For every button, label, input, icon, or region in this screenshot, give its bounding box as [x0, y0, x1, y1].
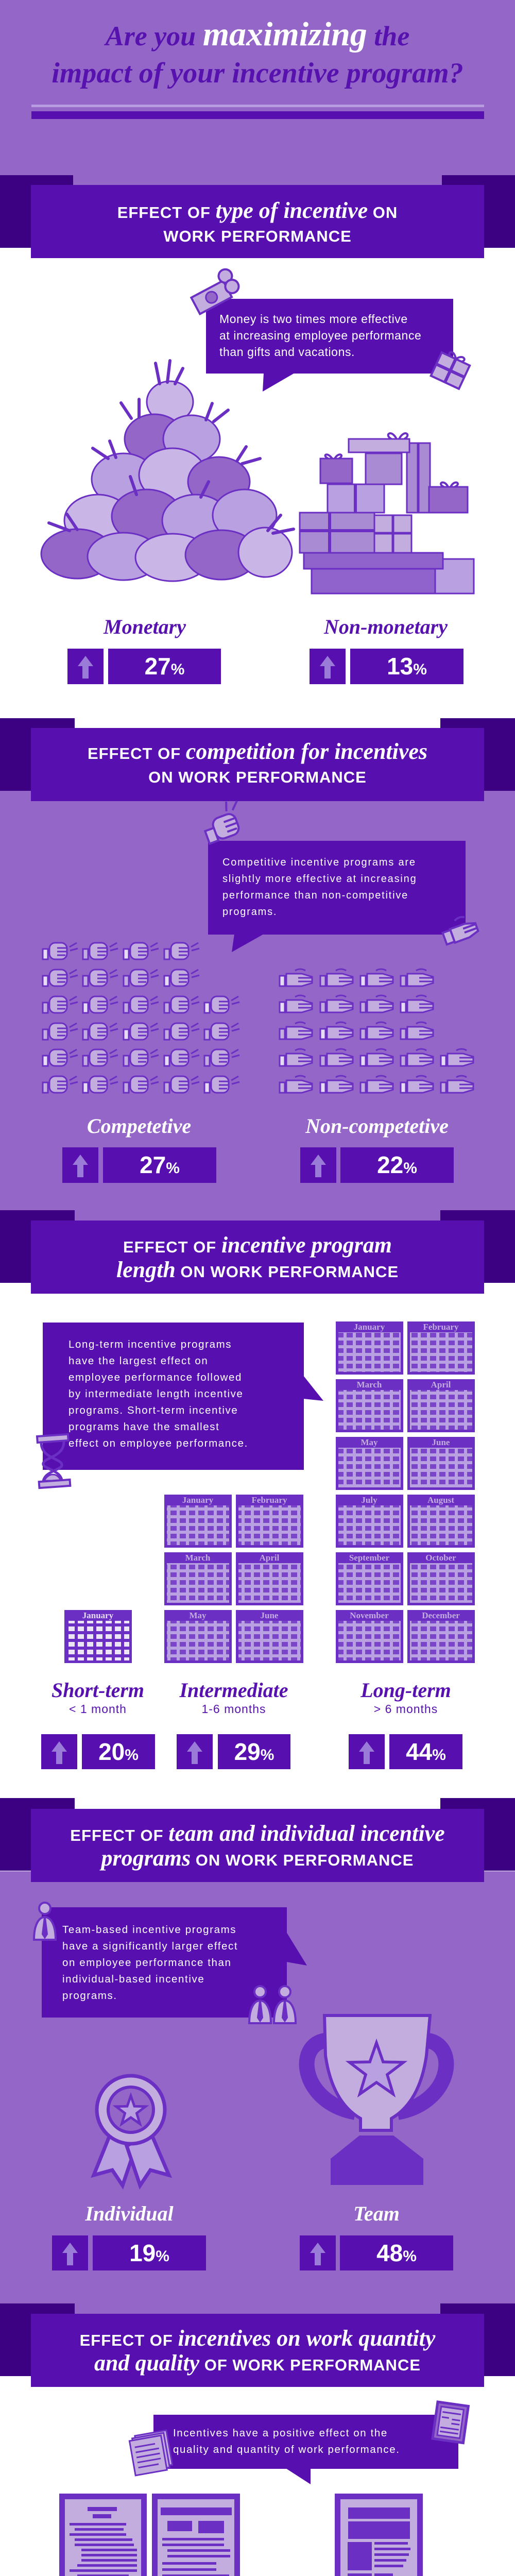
calendars: long-term: March: [357, 1380, 382, 1389]
stat: monetary 27%: 27%: [145, 653, 184, 680]
stat: non-monetary 13%: [310, 649, 464, 684]
background: team section: [0, 1871, 515, 2307]
callout box 5: [153, 2415, 458, 2484]
calendars: intermediate: April: [260, 1553, 280, 1563]
text: Intermediate: [179, 1679, 288, 1702]
stat: non-competitive 22%: [300, 1147, 454, 1183]
calendars: intermediate: January: [182, 1495, 214, 1505]
icon: hourglass: [37, 1434, 70, 1488]
icon: newspaper stack: [129, 2430, 173, 2476]
calendar: short-term January: January: [82, 1611, 114, 1620]
text: callout 2: performance than non-competitive: [222, 890, 408, 901]
icon: two persons: [249, 1986, 296, 2023]
label: Long-term: [360, 1679, 451, 1716]
calendars: long-term: [336, 1321, 475, 1663]
text: callout 1: [219, 312, 421, 359]
calendars: intermediate: [164, 1495, 303, 1663]
label: Individual: Individual: [85, 2202, 174, 2225]
icon: newspaper: [433, 2402, 468, 2443]
stat: long-term 44%: [349, 1734, 462, 1769]
text: > 6 months: [374, 1702, 438, 1716]
banner 4: team and individual: [31, 1809, 484, 1882]
text: callout 5: quality and quantity of work performance.: [173, 2444, 400, 2455]
callout box 3: [43, 1323, 323, 1470]
stat: competitive 27%: [62, 1147, 216, 1183]
background: competition section: [0, 790, 515, 1213]
text: callout 2: programs.: [222, 906, 277, 918]
calendars: long-term: April: [431, 1380, 451, 1389]
text: callout 3: programs. Short-term incentive: [68, 1404, 238, 1416]
stat: competitive 27%: 27%: [140, 1151, 180, 1178]
text: callout 1: Money is two times more effective: [219, 312, 408, 326]
banner 1 dark band: [0, 175, 515, 248]
calendars: long-term: February: [423, 1322, 459, 1332]
banner 4: team and individual: programs ON WORK PERFORMANCE: [101, 1845, 414, 1871]
calendars: long-term: January: [354, 1322, 385, 1332]
icon: fist: [198, 798, 247, 844]
text: callout 3: Long-term incentive programs: [68, 1338, 232, 1350]
label: Monetary: Monetary: [104, 615, 186, 638]
calendars: long-term: November: [350, 1611, 389, 1620]
stat: short-term 20%: [41, 1734, 155, 1769]
stat: monetary 27%: [67, 649, 221, 684]
title: [52, 15, 464, 89]
banner 1: type of incentive: WORK PERFORMANCE: [163, 227, 352, 245]
banner 3 dark band: [0, 1210, 515, 1283]
stat: team 48%: 48%: [376, 2240, 417, 2266]
text: callout 2: slightly more effective at increasing: [222, 873, 417, 885]
text: callout 3: have the largest effect on: [68, 1355, 208, 1367]
banner 1: type of incentive: [31, 185, 484, 258]
text: 1-6 months: [201, 1702, 266, 1716]
text: callout 5: [173, 2427, 400, 2455]
icon: trophy: [307, 2015, 446, 2185]
title rules: [31, 105, 484, 119]
calendars: intermediate: March: [185, 1553, 211, 1563]
stat: individual 19%: [52, 2235, 206, 2270]
banner 3: program length: length ON WORK PERFORMANCE: [116, 1257, 399, 1282]
calendar: short-term January: [64, 1610, 132, 1663]
stat: intermediate 29%: 29%: [234, 1738, 274, 1765]
text: callout 1: than gifts and vacations.: [219, 345, 355, 359]
documents: quantity: [59, 2494, 240, 2576]
stat: non-competitive 22%: 22%: [377, 1151, 417, 1178]
label: Intermediate: [179, 1679, 288, 1716]
icon: money bags pile: [41, 361, 294, 581]
icon: small gift: [431, 348, 472, 389]
label: Non-competetive: Non-competetive: [305, 1114, 449, 1138]
text: callout 4: have a significantly larger effect: [62, 1940, 238, 1952]
text: callout 1: at increasing employee performance: [219, 329, 421, 342]
banner 2: competition: [31, 728, 484, 801]
text: callout 2: Competitive incentive programs are: [222, 857, 416, 868]
calendars: long-term: August: [427, 1495, 454, 1505]
stat: short-term 20%: 20%: [98, 1738, 139, 1765]
banner 5: quantity and quality: [31, 2314, 484, 2387]
callout box 1: [206, 299, 453, 392]
label: Competetive: Competetive: [87, 1114, 191, 1138]
icon: gift boxes: [300, 433, 474, 594]
calendars: long-term: October: [425, 1553, 456, 1563]
banner 4: team and individual: EFFECT OF team and individual incentive: [70, 1821, 445, 1846]
label: Non-monetary: Non-monetary: [324, 615, 448, 638]
calendars: intermediate: May: [189, 1611, 207, 1620]
text: callout 4: programs.: [62, 1990, 117, 2002]
text: Short-term: [52, 1679, 144, 1702]
icon: money bill: [186, 266, 242, 314]
banner 2: competition: ON WORK PERFORMANCE: [148, 768, 367, 786]
document: quality: [335, 2494, 423, 2576]
calendars: intermediate: June: [261, 1611, 279, 1620]
text: callout 3: programs have the smallest: [68, 1421, 219, 1433]
icon: open hand: [440, 913, 479, 945]
icon grid: non-competitive hands: [280, 969, 473, 1093]
text: Long-term: [360, 1679, 451, 1702]
text: callout 3: employee performance followed: [68, 1371, 242, 1383]
icon: medal: [94, 2076, 169, 2185]
text: callout 3: effect on employee performance.: [68, 1437, 248, 1449]
calendars: long-term: June: [432, 1437, 450, 1447]
banner 5: quantity and quality: and quality OF WORK PERFORMANCE: [94, 2350, 421, 2376]
banner 1: type of incentive: EFFECT OF type of incentive ON: [117, 198, 398, 223]
callout box 4: [42, 1907, 307, 2018]
text: callout 4: Team-based incentive programs: [62, 1924, 236, 1936]
banner 5 dark band: [0, 2303, 515, 2376]
calendars: long-term: May: [360, 1437, 378, 1447]
title: Are you maximizing the: [106, 15, 409, 53]
stat: intermediate 29%: [177, 1734, 290, 1769]
banner 4 dark band: [0, 1798, 515, 1871]
banner 5: quantity and quality: EFFECT OF incentives on work quantity: [80, 2326, 435, 2351]
stat: non-monetary 13%: 13%: [387, 653, 427, 680]
stat: individual 19%: 19%: [129, 2240, 169, 2266]
calendars: [64, 1321, 475, 1663]
text: callout 4: individual-based incentive: [62, 1973, 204, 1985]
calendars: intermediate: February: [252, 1495, 287, 1505]
banner 2: competition: EFFECT OF competition for incentives: [88, 739, 427, 764]
callout box 2: [208, 841, 466, 952]
stat: long-term 44%: 44%: [406, 1738, 446, 1765]
icon: single person: [34, 1903, 56, 1940]
text: callout 4: on employee performance than: [62, 1957, 232, 1969]
label: Short-term: [52, 1679, 144, 1716]
label: Team: Team: [353, 2202, 400, 2225]
title: impact of your incentive program?: [52, 57, 464, 89]
banner 3: program length: EFFECT OF incentive program: [123, 1232, 392, 1258]
calendars: long-term: July: [361, 1495, 377, 1505]
calendars: long-term: September: [349, 1553, 390, 1563]
banner 3: program length: [31, 1221, 484, 1294]
calendars: long-term: December: [422, 1611, 460, 1620]
icon grid: competitive fists: [43, 943, 239, 1093]
banner 2 dark band: [0, 718, 515, 791]
text: callout 3: by intermediate length incentive: [68, 1388, 244, 1400]
text: callout 2: [222, 857, 417, 918]
text: callout 5: Incentives have a positive effect on the: [173, 2427, 388, 2439]
text: callout 3: [68, 1338, 248, 1449]
text: callout 4: [62, 1924, 238, 2002]
stat: team 48%: [300, 2235, 453, 2270]
text: < 1 month: [69, 1702, 127, 1716]
background: title area: [0, 0, 515, 178]
